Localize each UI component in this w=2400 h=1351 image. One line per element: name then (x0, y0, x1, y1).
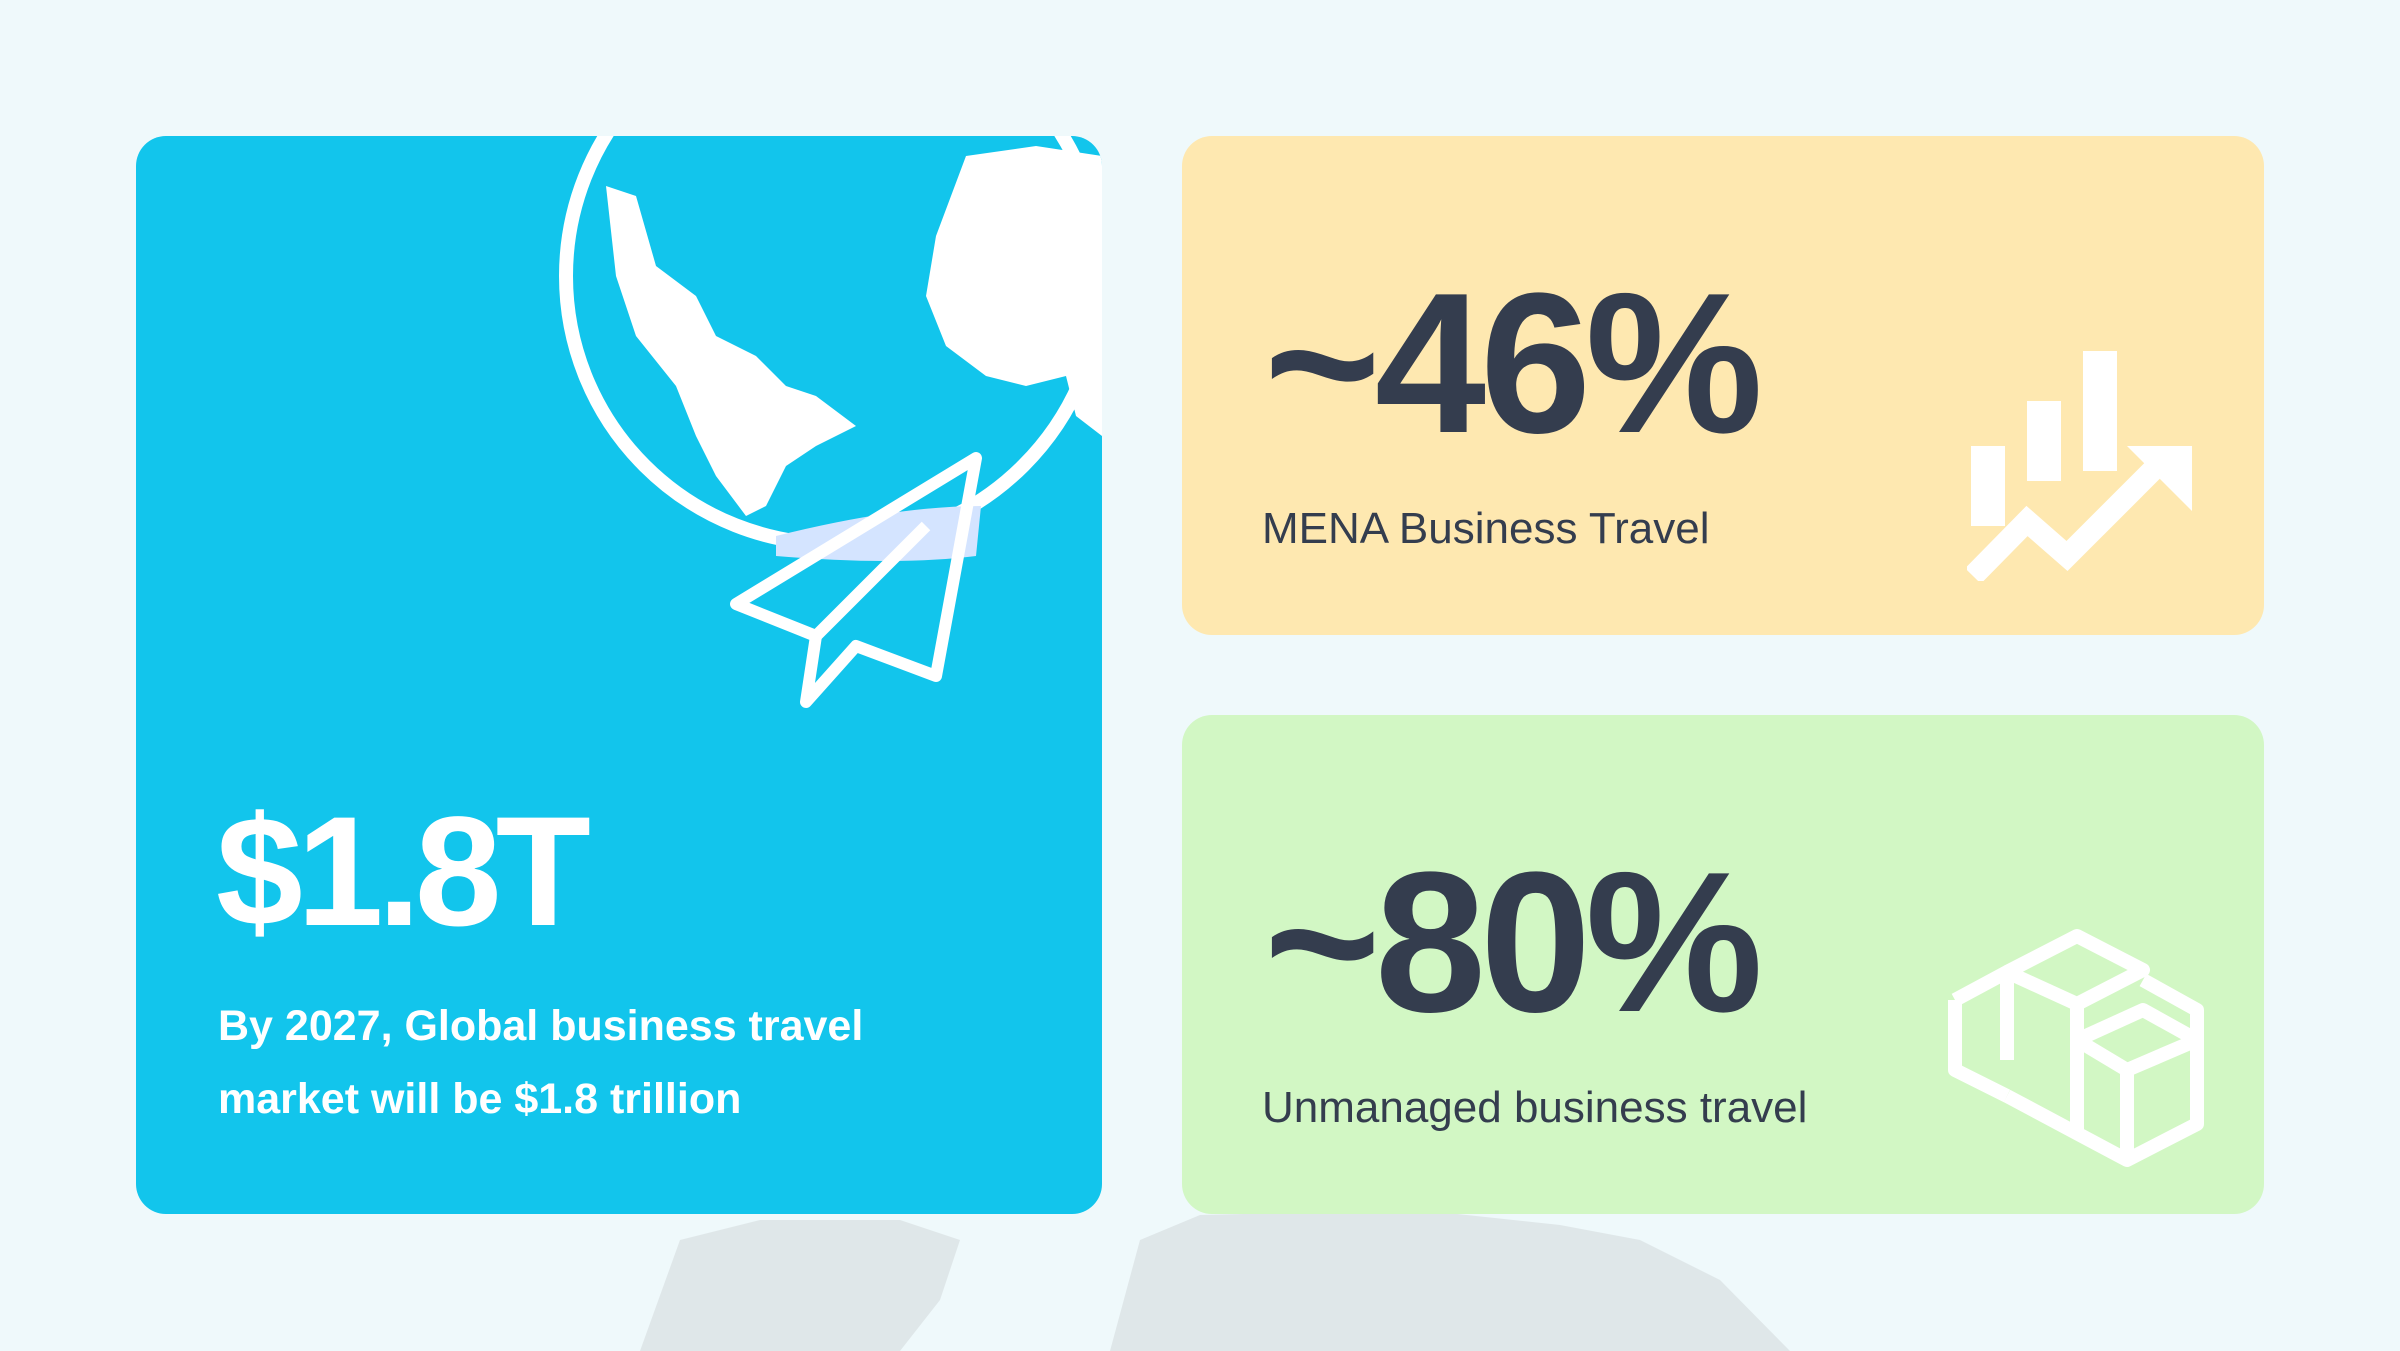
label: unmanaged: Unmanaged business travel (1262, 1083, 1807, 1132)
icon: growth chart (1967, 351, 2192, 581)
stat: 46%: ~46% (1264, 252, 1757, 475)
panel: global market (136, 136, 1102, 1214)
stat: 80%: ~80% (1264, 831, 1757, 1054)
icon: globe with paper plane (559, 136, 1102, 708)
label: MENA: MENA Business Travel (1262, 504, 1710, 553)
panel: MENA (1182, 136, 2264, 635)
background world map (640, 1214, 1790, 1351)
text: description: market will be $1.8 trillion (218, 1075, 741, 1123)
panel: unmanaged (1182, 715, 2264, 1214)
text: description: By 2027, Global business travel (218, 1002, 863, 1050)
icon: 3d blocks (1948, 929, 2204, 1167)
text: description (218, 1002, 863, 1123)
heading: $1.8T: $1.8T (216, 785, 585, 959)
